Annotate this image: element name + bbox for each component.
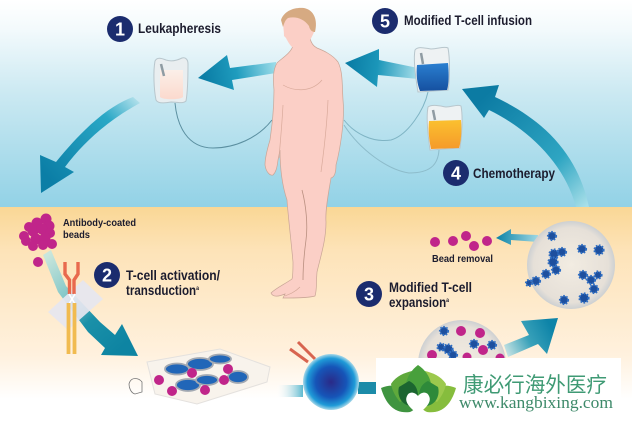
step 5 label: 5 bbox=[380, 12, 390, 32]
step 3 label: 3 bbox=[364, 284, 374, 304]
arrow: bag to bead stage bbox=[40, 97, 140, 193]
step 4 label bbox=[443, 160, 555, 186]
dish: T cells and beads bbox=[418, 320, 506, 408]
website: www.kangbixing.com bbox=[459, 393, 613, 412]
step 1 label: Leukapheresis bbox=[138, 21, 221, 36]
hair bbox=[281, 8, 316, 32]
step 5 label bbox=[372, 8, 532, 34]
brand name: 康必行海外医疗 bbox=[463, 374, 607, 397]
beads caption bbox=[63, 218, 136, 241]
beads caption: beads bbox=[63, 230, 90, 241]
tubing bbox=[175, 92, 439, 173]
step 1 label bbox=[107, 16, 221, 42]
leg gap bbox=[302, 190, 307, 280]
arrow: expansion back to infusion bbox=[462, 85, 589, 207]
background: ground bbox=[0, 207, 632, 425]
step 2 label: T-cell activation/ bbox=[126, 268, 220, 283]
hexagon activation panel bbox=[48, 280, 103, 330]
T-cell receptors bbox=[290, 342, 315, 362]
arrow: to bead removal bbox=[496, 229, 538, 245]
step 5 label: Modified T-cell infusion bbox=[404, 13, 532, 28]
body bbox=[265, 38, 343, 298]
chest, arm and torso lines bbox=[279, 80, 328, 172]
background: sky bbox=[0, 0, 632, 207]
step 2 label bbox=[94, 262, 220, 298]
bag: modified T cells bbox=[414, 47, 450, 92]
bag: leukapheresis bbox=[154, 58, 188, 103]
arrow: infusion bag to patient bbox=[345, 49, 418, 87]
icon: white heart bbox=[406, 393, 430, 414]
step 2 label: a bbox=[196, 286, 200, 292]
person bbox=[265, 8, 343, 298]
step 1 label: 1 bbox=[115, 20, 125, 40]
bag: chemotherapy bbox=[427, 105, 462, 150]
step 2 label: 2 bbox=[102, 266, 112, 286]
watermark panel bbox=[376, 358, 621, 425]
arrow: activation to flask bbox=[43, 250, 138, 356]
bead removal caption: Bead removal bbox=[432, 253, 493, 265]
arrow: expansion up bbox=[504, 318, 558, 357]
dish: expanded T cells bbox=[526, 221, 615, 309]
step 3 label: Modified T-cell bbox=[389, 280, 472, 295]
arrow: patient to leukapheresis bag bbox=[198, 55, 276, 90]
step 4 label: Chemotherapy bbox=[473, 166, 555, 181]
step 2 label: transduction bbox=[126, 283, 208, 298]
bead removal row bbox=[430, 231, 492, 251]
head bbox=[283, 10, 314, 48]
antibody-coated beads cluster bbox=[19, 214, 57, 267]
antibody construct bbox=[65, 262, 78, 354]
arrow stub out of cell bbox=[358, 382, 376, 394]
step 3 label: expansion bbox=[389, 295, 456, 310]
beads caption: Antibody-coated bbox=[63, 218, 136, 229]
step 3 label bbox=[356, 280, 472, 310]
step 4 label: 4 bbox=[451, 164, 461, 184]
icon: lotus logo bbox=[381, 365, 456, 414]
modified T cell bbox=[303, 354, 359, 410]
step 3 label: a bbox=[446, 298, 450, 304]
arrow stub into cell bbox=[277, 385, 303, 397]
culture flask bbox=[129, 349, 270, 404]
